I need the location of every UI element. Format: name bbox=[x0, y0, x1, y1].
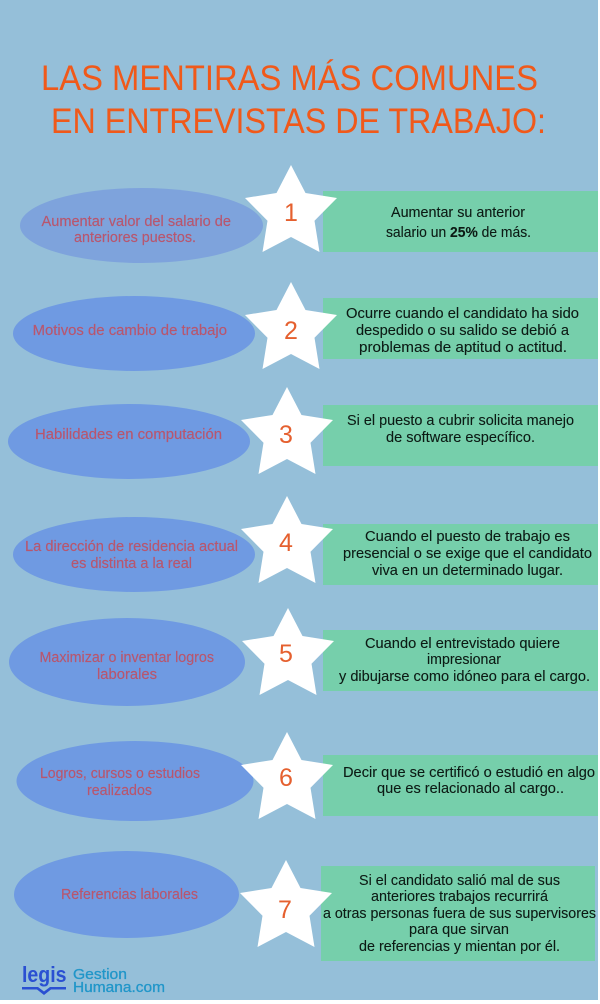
title bbox=[41, 58, 546, 141]
star: number 2: 2 bbox=[284, 317, 298, 345]
star: number 7 bbox=[240, 860, 332, 947]
star: number 4: 4 bbox=[279, 529, 293, 557]
green box: explanation 4: Cuando el puesto de trabajo es bbox=[365, 529, 570, 545]
row 7 bbox=[14, 851, 596, 961]
green box: explanation 5: y dibujarse como idóneo para el cargo. bbox=[339, 669, 590, 685]
green box: explanation 2 bbox=[323, 298, 598, 359]
oval: lie 1 bbox=[20, 188, 263, 263]
row 4 bbox=[13, 496, 598, 592]
logo: Legis Gestion Humana.com: Humana.com bbox=[73, 980, 165, 996]
green box: explanation 1 bbox=[323, 191, 598, 252]
oval: lie 2: Motivos de cambio de trabajo bbox=[33, 323, 227, 339]
green box: explanation 3 bbox=[323, 405, 598, 466]
oval: lie 2 bbox=[13, 296, 255, 371]
green box: explanation 5: Cuando el entrevistado quiere bbox=[365, 636, 560, 652]
oval: lie 4 bbox=[13, 517, 255, 592]
logo: Legis Gestion Humana.com: Gestion bbox=[73, 967, 127, 983]
oval: lie 1: Aumentar valor del salario de bbox=[42, 214, 231, 230]
oval: lie 6 bbox=[16, 741, 254, 821]
oval: lie 3: Habilidades en computación bbox=[35, 427, 222, 443]
green box: explanation 7: Si el candidato salió mal de sus bbox=[359, 873, 560, 889]
green box: explanation 2: despedido o su salido se debió a bbox=[356, 323, 570, 339]
logo: Legis Gestion Humana.com bbox=[22, 962, 165, 996]
star: number 2 bbox=[245, 282, 337, 369]
oval: lie 4: es distinta a la real bbox=[71, 556, 192, 572]
oval: lie 5: Maximizar o inventar logros bbox=[40, 650, 214, 666]
green box: explanation 5 bbox=[323, 630, 598, 691]
green box: explanation 4: viva en un determinado lugar. bbox=[372, 563, 563, 579]
row 1 bbox=[20, 165, 598, 263]
green box: explanation 4 bbox=[323, 524, 598, 585]
green box: explanation 6: que es relacionado al cargo.. bbox=[377, 781, 564, 797]
title: LAS MENTIRAS MÁS COMUNES bbox=[41, 58, 538, 98]
green box: explanation 7: para que sirvan bbox=[409, 922, 509, 938]
star: number 3: 3 bbox=[279, 421, 293, 449]
row 5 bbox=[9, 608, 598, 706]
star: number 1: 1 bbox=[284, 199, 298, 227]
star: number 1 bbox=[245, 165, 337, 252]
row 3 bbox=[8, 387, 598, 479]
oval: lie 7 bbox=[14, 851, 239, 938]
green box: explanation 4: presencial o se exige que el candidato bbox=[343, 546, 592, 562]
logo: Legis Gestion Humana.com: legis bbox=[22, 962, 66, 987]
star: number 5: 5 bbox=[279, 640, 293, 668]
green box: explanation 7: a otras personas fuera de sus supervisores bbox=[323, 906, 596, 922]
row 6 bbox=[16, 732, 598, 821]
green box: explanation 3: Si el puesto a cubrir solicita manejo bbox=[347, 413, 574, 429]
oval: lie 7: Referencias laborales bbox=[61, 887, 198, 903]
oval: lie 3 bbox=[8, 404, 250, 479]
green box: explanation 7 bbox=[321, 866, 596, 961]
green box: explanation 1: Aumentar su anterior bbox=[391, 205, 525, 221]
star: number 3 bbox=[241, 387, 333, 474]
title: EN ENTREVISTAS DE TRABAJO: bbox=[51, 101, 546, 141]
oval: lie 6: realizados bbox=[87, 783, 152, 799]
oval: lie 5: laborales bbox=[97, 667, 157, 683]
row 2 bbox=[13, 282, 598, 371]
green box: explanation 5: impresionar bbox=[427, 652, 501, 668]
star: number 6: 6 bbox=[279, 764, 293, 792]
green box: explanation 6 bbox=[323, 755, 598, 816]
star: number 6 bbox=[241, 732, 333, 819]
green box: explanation 6: Decir que se certificó o estudió en algo bbox=[343, 765, 595, 781]
oval: lie 4: La dirección de residencia actual bbox=[25, 539, 238, 555]
oval: lie 5 bbox=[9, 618, 245, 706]
green box: explanation 7: anteriores trabajos recurrirá bbox=[371, 889, 549, 905]
green box: explanation 3: de software específico. bbox=[386, 430, 535, 446]
green box: explanation 1: salario un 25% de más. bbox=[386, 225, 531, 241]
star: number 5 bbox=[242, 608, 334, 695]
oval: lie 1: anteriores puestos. bbox=[74, 230, 196, 246]
green box: explanation 7: de referencias y mientan por él. bbox=[359, 939, 560, 955]
star: number 7: 7 bbox=[278, 896, 292, 924]
green box: explanation 2: problemas de aptitud o actitud. bbox=[359, 340, 567, 356]
star: number 4 bbox=[241, 496, 333, 583]
green box: explanation 2: Ocurre cuando el candidato ha sido bbox=[346, 306, 579, 322]
oval: lie 6: Logros, cursos o estudios bbox=[40, 766, 200, 782]
